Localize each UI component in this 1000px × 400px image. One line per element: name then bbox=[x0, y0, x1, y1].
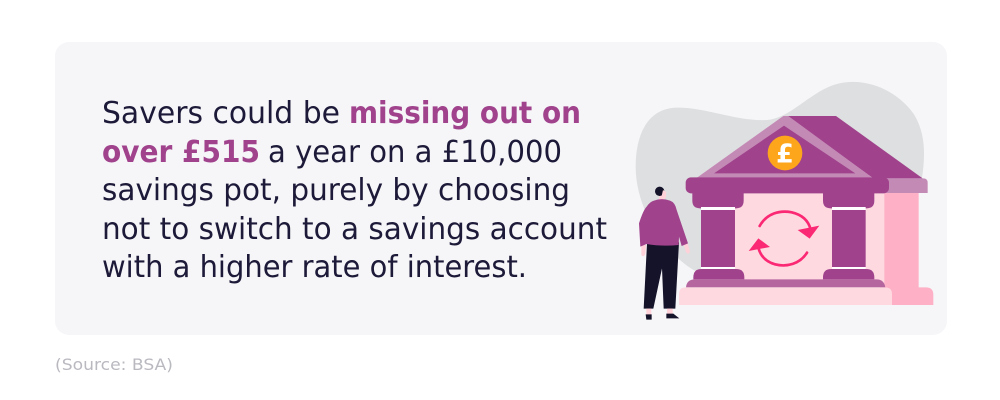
text block: savers statement: a year on a £10,000 bbox=[268, 135, 562, 170]
icon: standing person bbox=[639, 187, 690, 320]
base step bbox=[686, 279, 885, 287]
front wall bbox=[720, 190, 884, 283]
pediment inner bbox=[714, 126, 855, 173]
text block: savers statement: savings pot, purely by choosing bbox=[102, 173, 570, 208]
text block: savers statement: Savers could be bbox=[102, 96, 340, 131]
icon: pound coin bbox=[768, 136, 802, 170]
roof pediment bbox=[696, 116, 873, 178]
text block: savers statement bbox=[102, 96, 607, 285]
roof side bbox=[787, 116, 923, 178]
entablature bbox=[686, 177, 889, 193]
plinth bbox=[679, 287, 892, 305]
icon: grey background blob bbox=[636, 82, 924, 273]
panel: background card bbox=[55, 42, 947, 335]
side wall bbox=[880, 190, 919, 290]
entablature side bbox=[883, 178, 928, 193]
trousers bbox=[644, 242, 679, 309]
text block: savers statement: with a higher rate of interest. bbox=[102, 250, 527, 285]
icon: pound coin: £ bbox=[776, 138, 794, 168]
left column bbox=[692, 193, 744, 279]
illustration: bank and person bbox=[636, 82, 933, 320]
right column bbox=[823, 193, 874, 279]
text block: savers statement: missing out on bbox=[349, 96, 581, 131]
neck and head bbox=[659, 192, 666, 201]
icon: bank building bbox=[679, 116, 933, 305]
plinth side bbox=[887, 287, 933, 305]
jumper bbox=[639, 199, 688, 247]
source note: (Source: BSA) bbox=[55, 355, 173, 374]
text block: savers statement: over £515 bbox=[102, 135, 260, 170]
text block: savers statement: not to switch to a savings account bbox=[102, 212, 607, 247]
ankles bbox=[646, 309, 673, 315]
icon: refresh arrows bbox=[749, 212, 819, 265]
shoes bbox=[646, 314, 679, 320]
hands bbox=[641, 245, 646, 256]
